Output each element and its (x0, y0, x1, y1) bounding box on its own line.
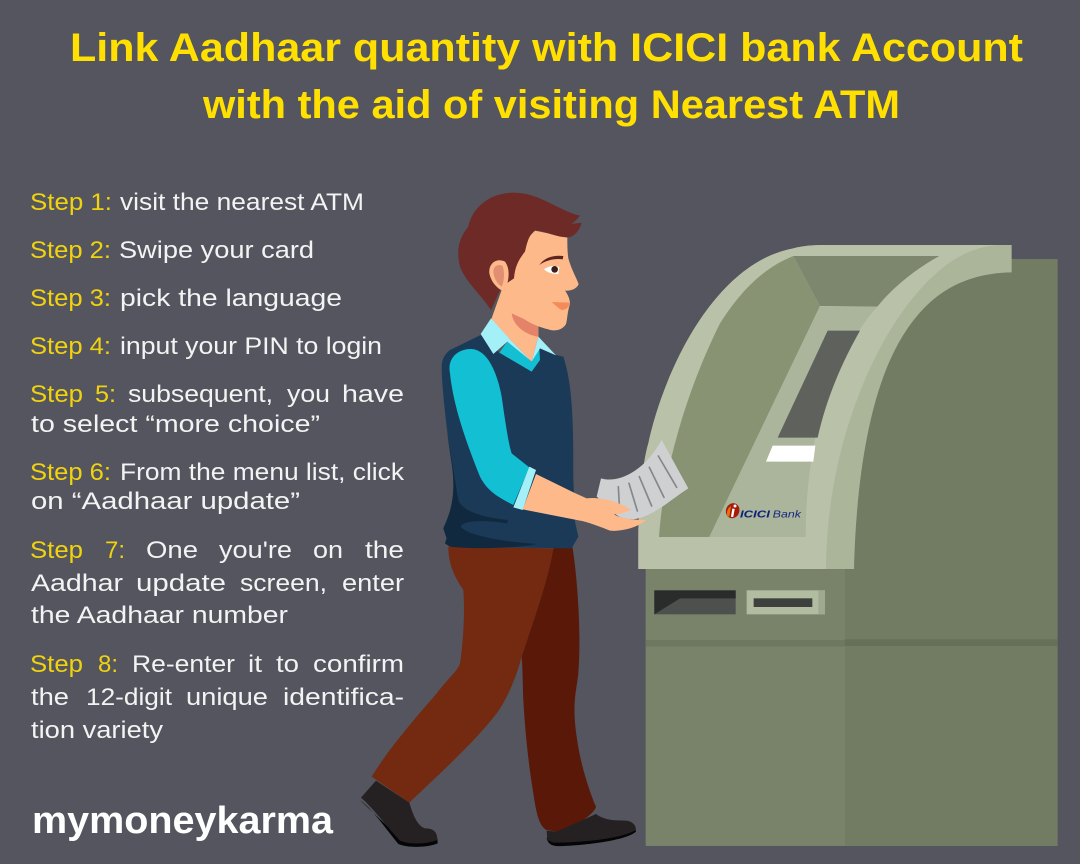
step 7: Aadhar (31, 570, 123, 597)
eye (544, 266, 559, 274)
step 5: subsequent, (128, 381, 273, 408)
step 4 (30, 333, 382, 360)
ATM lower front (646, 569, 845, 846)
ATM machine (638, 245, 1058, 846)
step 1: visit the nearest ATM (120, 189, 364, 216)
step 3: pick the language (120, 285, 342, 312)
title: with the aid of visiting Nearest ATM (202, 83, 900, 127)
front trouser leg (372, 547, 553, 803)
step 7: on (313, 537, 343, 564)
title (70, 26, 1023, 127)
step 6: From the menu list, click (120, 459, 405, 486)
sleeve (449, 349, 529, 505)
brand wordmark: mymoneykarma (32, 800, 334, 842)
step 8: the (31, 684, 69, 711)
cuff (513, 467, 536, 510)
step 1: Step 1: (30, 189, 112, 216)
back trouser leg (522, 543, 596, 832)
left shoe (360, 781, 438, 847)
right shoe (547, 814, 636, 846)
hair (458, 193, 582, 310)
vest shadow (443, 430, 537, 548)
ICICI Bank logo: Bank (773, 509, 802, 520)
screen frame (709, 307, 877, 537)
step 2: Swipe your card (119, 237, 314, 264)
step 8: identifica- (283, 684, 404, 711)
step 6: on “Aadhaar update” (31, 488, 300, 515)
forearm and hand (523, 474, 646, 531)
screen (778, 331, 860, 438)
person legs (360, 543, 636, 847)
step 8: it (248, 651, 262, 678)
step 8: to (276, 651, 299, 678)
collar (481, 318, 556, 362)
step 7: screen, (240, 570, 327, 597)
step 8: confirm (313, 651, 404, 678)
neck (491, 290, 538, 362)
step 6 (30, 459, 405, 515)
shirt V (499, 342, 540, 372)
step 5: Step (30, 381, 83, 408)
steps list (30, 189, 405, 744)
step 4: Step 4: (30, 333, 111, 360)
step 8 (30, 651, 404, 744)
card slot (654, 590, 736, 614)
step 5: have (342, 381, 404, 408)
step 2: Step 2: (30, 237, 111, 264)
step 3 (30, 285, 342, 312)
vest (442, 335, 578, 548)
step 7: the (365, 537, 404, 564)
step 7: One (146, 537, 198, 564)
ATM body right side (845, 259, 1058, 846)
step 4: input your PIN to login (120, 333, 382, 360)
step 3: Step 3: (30, 285, 111, 312)
step 7: you're (219, 537, 292, 564)
interior top panel (793, 256, 939, 307)
step 8: Re-enter (132, 651, 235, 678)
ICICI Bank logo: ICICI (740, 509, 770, 520)
step 7 (30, 537, 404, 629)
paper (597, 440, 688, 519)
person upper body (442, 193, 688, 548)
step 8: tion variety (31, 717, 163, 744)
step 5 (30, 381, 404, 438)
step 8: Step (30, 651, 83, 678)
ICICI Bank logo (724, 501, 802, 520)
interior left panel (659, 256, 820, 537)
step 8: 8: (98, 651, 118, 678)
arch light frame (638, 245, 997, 569)
step 7: Step (30, 537, 83, 564)
eyebrow (539, 256, 563, 265)
step 5: to select “more choice” (31, 411, 320, 438)
arch outer band (638, 245, 1012, 569)
neck shadow (512, 313, 547, 337)
step 7: enter (342, 570, 404, 597)
step 6: Step 6: (30, 459, 111, 486)
step 7: 7: (105, 537, 125, 564)
seam (646, 640, 845, 647)
face (502, 231, 579, 330)
step 2 (30, 237, 314, 264)
step 1 (30, 189, 364, 216)
receipt slip (766, 446, 815, 462)
step 8: unique (186, 684, 268, 711)
step 7: the Aadhaar number (31, 602, 288, 629)
step 5: you (287, 381, 330, 408)
step 5: 5: (95, 381, 116, 408)
step 8: 12-digit (86, 684, 172, 711)
step 7: update (136, 570, 226, 597)
mouth (552, 302, 570, 310)
cash reader (747, 590, 825, 614)
title: Link Aadhaar quantity with ICICI bank Account (70, 26, 1023, 70)
ear (489, 260, 509, 292)
